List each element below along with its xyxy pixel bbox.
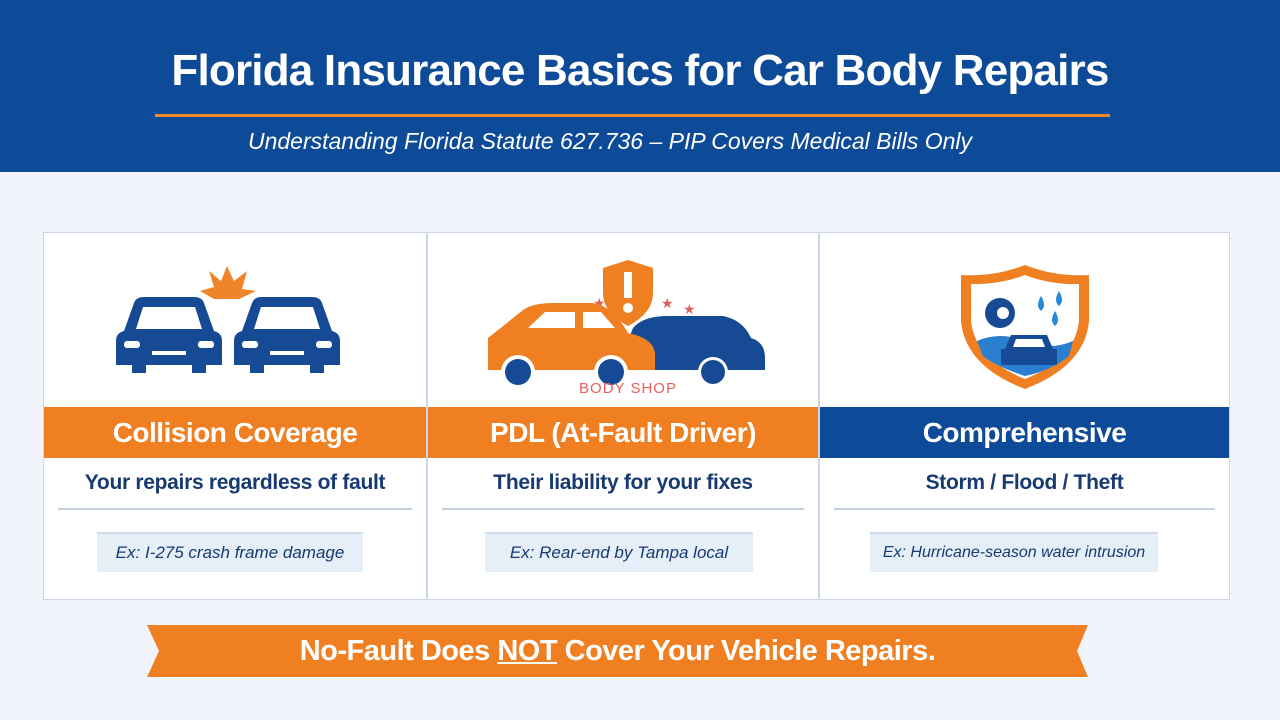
heading band xyxy=(820,407,1229,458)
subtitle: Understanding Florida Statute 627.736 – PIP Covers Medical Bills Only xyxy=(248,128,972,154)
icon: cars with shield: BODY SHOP xyxy=(579,380,677,397)
example box: Ex: Rear-end by Tampa local xyxy=(510,543,728,562)
panel: PDL xyxy=(427,232,819,600)
icon: cars with shield: ★ xyxy=(593,295,606,311)
example box: Ex: Hurricane-season water intrusion xyxy=(883,544,1145,561)
example box: Ex: I-275 crash frame damage xyxy=(116,543,344,562)
example box xyxy=(97,532,363,572)
callout banner xyxy=(147,625,1088,677)
heading band xyxy=(428,407,818,458)
icon: shield storm xyxy=(961,265,1089,389)
callout banner: No-Fault Does NOT Cover Your Vehicle Repairs. xyxy=(300,635,935,667)
description: Their liability for your fixes xyxy=(493,471,753,494)
header band xyxy=(0,0,1280,172)
heading band: Comprehensive xyxy=(923,417,1126,448)
description: Storm / Flood / Theft xyxy=(926,471,1123,494)
heading band xyxy=(44,407,426,458)
icon: cars with shield xyxy=(488,260,765,397)
icon: cars with shield: ★ xyxy=(683,301,696,317)
description: Your repairs regardless of fault xyxy=(85,471,385,494)
icon: cars with shield: ★ xyxy=(573,300,586,316)
icon: cars with shield: ★ xyxy=(661,295,674,311)
heading band: Collision Coverage xyxy=(113,417,357,448)
title: Florida Insurance Basics for Car Body Repairs xyxy=(171,46,1109,95)
example box xyxy=(870,532,1158,572)
panel: collision xyxy=(43,232,427,600)
panel: comprehensive xyxy=(819,232,1230,600)
orange rule xyxy=(155,114,1110,117)
heading band: PDL (At-Fault Driver) xyxy=(490,417,756,448)
example box xyxy=(485,532,753,572)
icon: two cars crash xyxy=(116,266,340,373)
